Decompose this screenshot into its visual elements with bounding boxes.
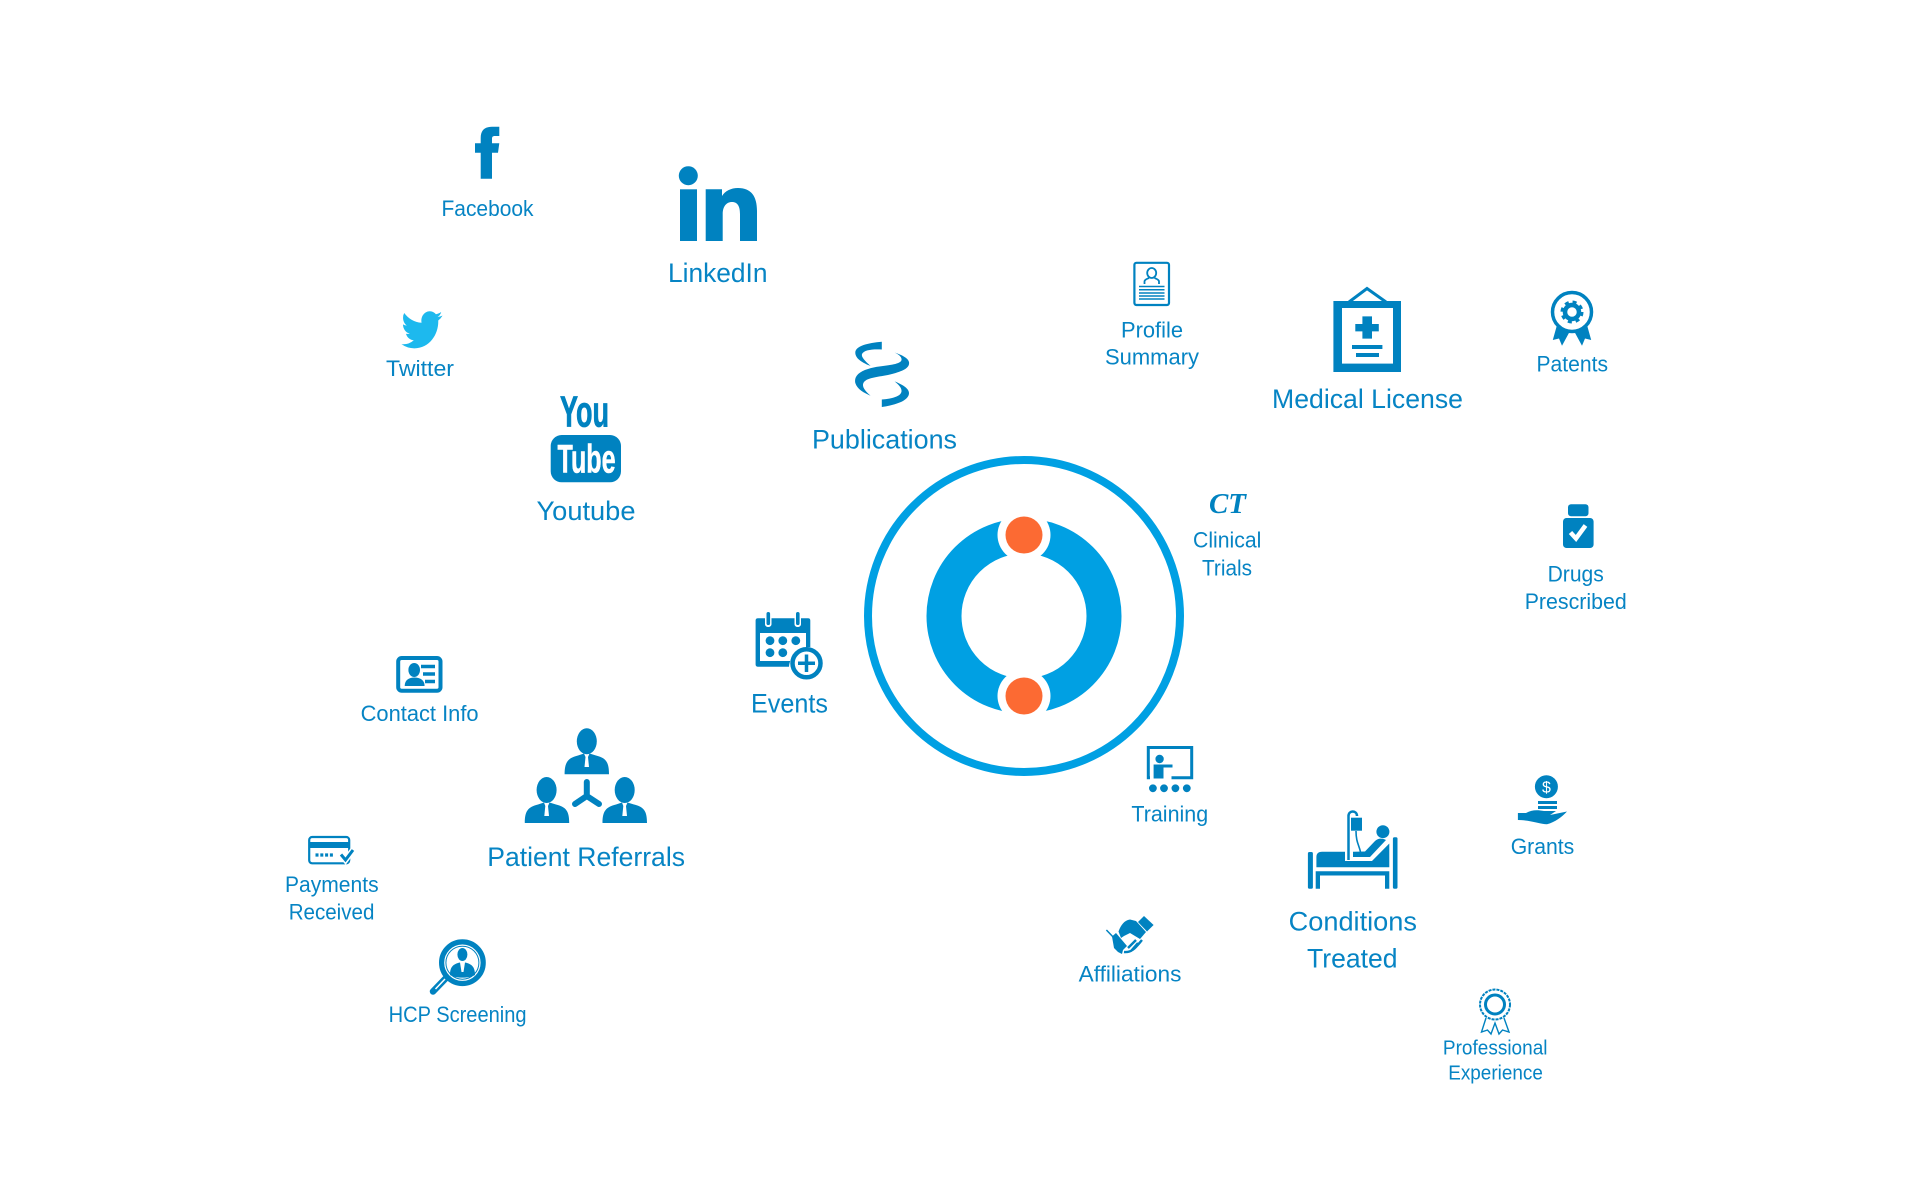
item: Clinical Trials: Clinical [1193, 528, 1261, 552]
item: Conditions Treated: Conditions [1289, 906, 1417, 936]
item: LinkedIn: LinkedIn [668, 258, 768, 288]
item: Professional Experience [1443, 990, 1548, 1084]
item: Facebook: Facebook [442, 196, 534, 221]
item: Patient Referrals [487, 728, 685, 872]
item: Profile Summary [1105, 263, 1199, 370]
item: Drugs Prescribed: Drugs [1548, 562, 1604, 586]
item: Grants: Grants [1511, 834, 1574, 859]
item: Youtube: You [560, 388, 609, 437]
item: Patient Referrals: Patient Referrals [487, 842, 685, 872]
item: Youtube [536, 388, 636, 526]
item: Youtube: Youtube [536, 496, 636, 526]
item: Youtube: Tube [558, 438, 616, 482]
item: Twitter [386, 311, 454, 381]
item: Publications [812, 342, 957, 454]
central logo [868, 460, 1180, 772]
item: Events [751, 612, 828, 718]
item: Affiliations [1079, 916, 1181, 986]
item: Publications: Publications [812, 424, 957, 454]
item: Events: Events [751, 688, 828, 718]
item: HCP Screening: HCP Screening [389, 1002, 527, 1027]
item: Training: Training [1131, 802, 1208, 826]
item: Training [1131, 748, 1208, 826]
item: Clinical Trials: CT [1209, 488, 1247, 520]
item: LinkedIn [668, 166, 768, 288]
item: Clinical Trials: Trials [1202, 556, 1252, 580]
item: Contact Info [361, 658, 479, 726]
item: Professional Experience: Professional [1443, 1038, 1548, 1060]
item: Professional Experience: Experience [1448, 1062, 1543, 1084]
item: Conditions Treated: Treated [1307, 944, 1398, 974]
item: Grants: $ [1542, 780, 1551, 796]
item: Payments Received [285, 837, 379, 924]
item: Profile Summary: Summary [1105, 344, 1199, 370]
item: Contact Info: Contact Info [361, 701, 479, 726]
item: Profile Summary: Profile [1121, 317, 1183, 342]
item: Conditions Treated [1289, 812, 1417, 974]
item: Drugs Prescribed: Prescribed [1525, 589, 1627, 614]
item: Medical License: Medical License [1272, 384, 1463, 414]
item: Patents: Patents [1536, 352, 1608, 376]
item: Drugs Prescribed [1525, 504, 1627, 614]
item: HCP Screening [389, 942, 527, 1027]
item: Facebook [442, 127, 534, 221]
item: Affiliations: Affiliations [1079, 962, 1181, 986]
item: Twitter: Twitter [386, 356, 454, 381]
item: Grants [1511, 775, 1574, 859]
item: Payments Received: Payments [285, 872, 379, 897]
item: Patents [1536, 292, 1608, 376]
item: Medical License [1272, 288, 1463, 414]
item: Clinical Trials [1193, 488, 1261, 580]
item: Payments Received: Received [289, 900, 374, 924]
